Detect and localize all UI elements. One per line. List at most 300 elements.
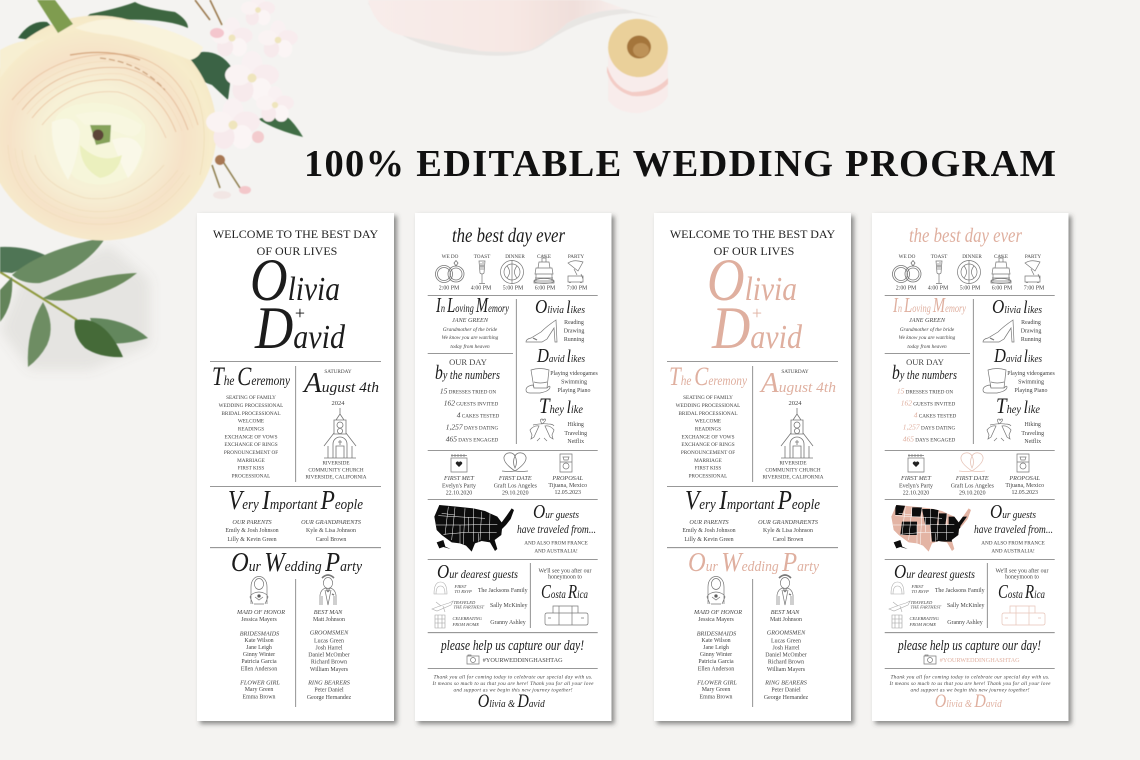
ceremony heading: The Ceremony [212, 362, 291, 391]
memory text [899, 317, 956, 350]
thank you note: Thank you all for coming today to celebrate our special day with us. [434, 674, 592, 680]
heading: welcome: OF OUR LIVES [257, 244, 337, 258]
our day by the numbers [892, 357, 957, 384]
dearest guests list: The Jacksons Family [935, 588, 985, 594]
thank you note: and support as we begin this new journey together! [910, 688, 1030, 694]
David likes: David likes [993, 345, 1042, 367]
groom side: Matt Johnson [313, 617, 345, 623]
dearest guests list: TRAVELED [910, 600, 933, 605]
also from text: AND AUSTRALIA! [534, 548, 578, 554]
dearest guests list: Granny Ashley [947, 620, 983, 626]
flower base [0, 0, 246, 271]
icon: ring box [560, 454, 572, 472]
icon: church [781, 408, 813, 458]
parents: OUR PARENTS [232, 519, 272, 526]
green stem [37, 0, 73, 33]
David hobbies: Swimming [1018, 380, 1044, 386]
couple hobbies: Traveling [564, 431, 587, 437]
our day by the numbers: by the numbers [892, 362, 957, 384]
groom side: Daniel McOmber [308, 652, 350, 658]
groom side: Richard Brown [311, 660, 347, 666]
map of USA [434, 505, 514, 552]
numbers list: 15 DRESSES TRIED ON [440, 386, 496, 396]
date: 2024 [788, 400, 802, 407]
milestones: Evelyn's Party [899, 484, 933, 490]
ceremony list: EXCHANGE OF VOWS [225, 434, 278, 440]
schedule times: 6:00 PM [535, 286, 556, 292]
numbers list: 4 CAKES TESTED [914, 410, 957, 420]
schedule labels: TOAST [931, 254, 948, 260]
grandparents: Kyle & Lisa Johnson [763, 528, 813, 534]
leaf back right [90, 318, 148, 343]
ceremony list [219, 395, 283, 480]
numbers list: 465 DAYS ENGAGED [446, 434, 499, 444]
signature: Olivia & David [478, 691, 545, 712]
schedule times: 2:00 PM [896, 286, 917, 292]
numbers list: 4 CAKES TESTED [457, 410, 500, 420]
spool of ribbon [600, 10, 676, 113]
venue: RIVERSIDE, CALIFORNIA [762, 474, 824, 480]
groom side: Josh Harrel [316, 646, 343, 652]
numbers list: 15 DRESSES TRIED ON [897, 386, 953, 396]
guests travelled heading [974, 501, 1053, 536]
icon: cake [534, 255, 554, 284]
ceremony list: BRIDAL PROCESSIONAL [221, 411, 281, 417]
leaf long upper [12, 237, 106, 283]
icon: top hat [526, 368, 550, 393]
They like: They like [539, 393, 584, 418]
inner petals [54, 103, 145, 185]
wedding party heading: Our Wedding Party [231, 547, 362, 577]
title: 100% EDITABLE WEDDING PROGRAM [304, 143, 1056, 185]
dearest guests list: Sally McKinley [490, 603, 527, 609]
parents: Lilly & Kevin Green [227, 537, 277, 543]
pink blossoms [195, 0, 298, 199]
top petal [75, 19, 203, 60]
icon: plane [432, 601, 453, 612]
also from text [981, 540, 1045, 554]
bride side: Jane Leigh [246, 645, 272, 651]
parents: Emily & Josh Johnson [225, 528, 279, 534]
dearest guests list: CELEBRATING [910, 616, 940, 621]
venue [762, 460, 824, 480]
leaf broad dark [74, 319, 123, 357]
honeymoon text [539, 567, 591, 581]
dearest guests list [452, 584, 528, 627]
ceremony list: PRONOUNCEMENT OF [224, 450, 278, 456]
couple hobbies: Hiking [1025, 422, 1041, 428]
ceremony list: FIRST KISS [695, 466, 721, 472]
groom side: Lucas Green [771, 638, 801, 644]
capture heading: please help us capture our day! [440, 638, 584, 654]
dearest guests list [908, 584, 985, 627]
dearest guests list: FIRST [454, 584, 467, 589]
schedule labels: DINNER [505, 254, 525, 260]
venue: RIVERSIDE, CALIFORNIA [305, 474, 367, 480]
honeymoon text: We'll see you after our [539, 567, 591, 574]
date: 2024 [332, 400, 345, 407]
milestones: Evelyn's Party [442, 484, 476, 490]
names: + [752, 303, 762, 323]
schedule labels: PARTY [1025, 254, 1041, 260]
honeymoon text [996, 567, 1048, 581]
ceremony list: PROCESSIONAL [689, 474, 727, 480]
Olivia likes: Olivia likes [992, 296, 1042, 318]
venue [305, 460, 367, 480]
milestones: PROPOSAL [551, 475, 584, 482]
bride side: Jessica Mayers [698, 617, 734, 623]
groom side [307, 609, 351, 701]
our day by the numbers: by the numbers [435, 362, 500, 384]
honeymoon text: honeymoon to [548, 575, 582, 581]
icon: bride [250, 576, 268, 604]
memory text: We know you are watching [442, 335, 499, 341]
ceremony list [676, 395, 740, 480]
map of USA [891, 505, 971, 552]
groom side: William Mayers [310, 667, 349, 673]
heading: best day ever: the best day ever [909, 225, 1022, 247]
icon: first to rsvp [434, 582, 447, 594]
guests travelled heading: Our guests [990, 501, 1036, 523]
grandparents [758, 519, 818, 543]
guests travelled heading: have traveled from... [974, 522, 1053, 536]
schedule times: 7:00 PM [567, 286, 588, 292]
bride side: Ginny Winter [243, 652, 275, 658]
ribbon [368, 0, 660, 56]
leaf top left [0, 247, 45, 273]
ceremony list: PRONOUNCEMENT OF [681, 450, 735, 456]
schedule labels: CAKE [537, 254, 551, 260]
also from text [524, 540, 588, 554]
couple hobbies [1021, 422, 1044, 445]
icon: bride [707, 576, 725, 604]
names [250, 247, 346, 361]
icon: home [892, 615, 902, 628]
schedule times: 5:00 PM [503, 286, 524, 292]
Olivia hobbies: Running [564, 337, 584, 343]
icon: plate [500, 260, 524, 284]
also from text: AND ALSO FROM FRANCE [524, 540, 588, 546]
thank you note: It means so much to us that you are here! Thank you for all your love [888, 680, 1051, 687]
icon: champagne [936, 261, 942, 284]
hashtag: #YOURWEDDINGHASHTAG [940, 657, 1020, 664]
dearest guests list: TO RSVP [454, 589, 472, 594]
icon: groom [320, 575, 336, 605]
Olivia hobbies: Drawing [564, 328, 584, 334]
thank you note: and support as we begin this new journey together! [454, 688, 573, 694]
names: Olivia [250, 247, 340, 313]
honeymoon text: honeymoon to [1005, 575, 1039, 581]
bride side: Patricia Garcia [241, 659, 277, 665]
guests travelled heading: have traveled from... [517, 522, 596, 536]
grandparents: Carol Brown [773, 537, 803, 543]
dearest guests heading: Our dearest guests [894, 561, 975, 583]
icon: shoe [526, 320, 557, 342]
panel: card 1 black front [197, 213, 394, 721]
left petal [0, 40, 45, 78]
date: August 4th [302, 368, 379, 399]
ceremony list: WELCOME [238, 419, 264, 425]
flower photo [0, 0, 303, 370]
ceremony list: PROCESSIONAL [232, 474, 270, 480]
very important people heading: Very Important People [685, 485, 820, 515]
thank you note [432, 674, 594, 694]
icon: heart [959, 453, 985, 472]
schedule times [439, 286, 588, 292]
groom side: Peter Daniel [771, 688, 801, 694]
panel: card 3 blush front [654, 213, 851, 721]
groom side: Peter Daniel [314, 688, 344, 694]
dearest guests list: FROM HOME [452, 622, 479, 627]
milestones: 29.10.2020 [959, 490, 986, 496]
our day by the numbers: OUR DAY [449, 357, 487, 367]
dearest guests list: FROM HOME [908, 622, 936, 627]
groom side: William Mayers [767, 667, 806, 673]
ceremony list: WELCOME [695, 419, 721, 425]
schedule labels: WE DO [899, 254, 916, 260]
schedule times: 4:00 PM [471, 286, 492, 292]
memory text: Grandmother of the bride [443, 326, 498, 333]
bride side: FLOWER GIRL [239, 680, 280, 686]
memory text: We know you are watching [899, 335, 956, 341]
names [707, 247, 803, 361]
milestones: 29.10.2020 [502, 490, 529, 496]
heading: welcome: OF OUR LIVES [714, 244, 794, 258]
schedule times: 4:00 PM [928, 286, 949, 292]
David hobbies: Playing Piano [558, 388, 590, 394]
couple hobbies: Traveling [1021, 431, 1044, 437]
David hobbies [1007, 371, 1056, 394]
bride side: MAID OF HONOR [693, 609, 742, 616]
hashtag: #YOURWEDDINGHASHTAG [483, 657, 563, 664]
grandparents: OUR GRANDPARENTS [301, 519, 361, 526]
milestones: PROPOSAL [1008, 475, 1041, 482]
bride side: Kate Wilson [244, 638, 274, 644]
names: Olivia [707, 247, 797, 313]
Olivia hobbies [564, 320, 584, 343]
venue: COMMUNITY CHURCH [308, 468, 364, 474]
groom side: Josh Harrel [772, 646, 800, 652]
icon: home [435, 615, 445, 628]
David hobbies [550, 371, 599, 394]
ceremony list: READINGS [238, 426, 264, 432]
bride side: Ginny Winter [700, 652, 732, 658]
venue: RIVERSIDE [322, 460, 350, 466]
icon: shoe [983, 320, 1014, 342]
Olivia hobbies: Reading [564, 320, 584, 326]
milestones: Tijuana, Mexico [1005, 483, 1044, 489]
dark leaf upper left [18, 22, 60, 40]
heading: best day ever: the best day ever [452, 225, 565, 247]
schedule times: 7:00 PM [1024, 286, 1045, 292]
milestones [899, 475, 1044, 496]
names: David [254, 295, 346, 361]
memory text: today from heaven [450, 343, 490, 350]
thank you note: Thank you all for coming today to celebrate our special day with us. [890, 674, 1050, 680]
bride side: FLOWER GIRL [696, 680, 737, 686]
icon: church [324, 408, 356, 458]
milestones: 22.10.2020 [446, 490, 472, 496]
numbers list [897, 386, 957, 444]
They like: They like [996, 393, 1041, 418]
groom side: GROOMSMEN [767, 630, 806, 636]
icon: plane [889, 601, 910, 612]
schedule labels: CAKE [994, 254, 1008, 260]
ceremony list: SEATING OF FAMILY [226, 395, 276, 401]
icon: plate [958, 260, 980, 284]
groom side: Richard Brown [768, 660, 804, 666]
groom side: Matt Johnson [770, 617, 802, 623]
schedule labels: DINNER [962, 254, 982, 260]
parents: Emily & Josh Johnson [682, 528, 736, 534]
icon: gramophone [1025, 261, 1040, 283]
bride side: Emma Brown [243, 694, 275, 700]
dearest guests list: Granny Ashley [490, 620, 526, 626]
grandparents: OUR GRANDPARENTS [758, 519, 818, 526]
David hobbies: Playing Piano [1015, 388, 1047, 394]
memory text: JANE GREEN [452, 317, 489, 324]
bride side: Ellen Anderson [698, 666, 734, 672]
bride side: Patricia Garcia [698, 659, 734, 665]
parents: Lilly & Kevin Green [684, 537, 734, 543]
icon: doves [987, 419, 1011, 441]
parents [225, 519, 279, 543]
our day by the numbers: OUR DAY [906, 357, 944, 367]
milestones: FIRST DATE [498, 475, 532, 482]
icon: first to rsvp [891, 582, 904, 594]
schedule times: 2:00 PM [439, 286, 460, 292]
groom side: RING BEARERS [307, 680, 350, 686]
grandparents: Carol Brown [316, 537, 346, 543]
dearest guests list: CELEBRATING [452, 616, 483, 621]
groom side: George Hernandez [764, 695, 808, 701]
ceremony list: READINGS [695, 426, 721, 432]
dearest guests list: Sally McKinley [947, 603, 984, 609]
dearest guests list: TO RSVP [912, 589, 929, 594]
schedule labels: PARTY [568, 254, 584, 260]
Olivia hobbies: Drawing [1021, 328, 1041, 334]
ceremony list: WEDDING PROCESSIONAL [676, 403, 740, 409]
ceremony list: EXCHANGE OF VOWS [682, 434, 735, 440]
milestones: 12.05.2023 [554, 490, 581, 496]
bride side: Mary Green [702, 687, 730, 693]
icon: rings [436, 260, 464, 282]
schedule labels [899, 254, 1041, 260]
heading: welcome [213, 227, 378, 258]
also from text: AND AUSTRALIA! [991, 548, 1035, 554]
dark leaves behind flower [80, 2, 188, 28]
groom side: RING BEARERS [764, 680, 807, 686]
milestones: 12.05.2023 [1011, 490, 1038, 496]
milestones [442, 475, 587, 496]
dearest guests list: THE FARTHEST [454, 604, 485, 610]
milestones: Tijuana, Mexico [548, 483, 587, 489]
ceremony list: FIRST KISS [238, 466, 264, 472]
capture heading: please help us capture our day! [897, 638, 1041, 654]
David hobbies: Playing videogames [550, 371, 599, 377]
memory text: today from heaven [907, 343, 947, 350]
milestones: FIRST DATE [955, 475, 989, 482]
eucalyptus stem [0, 272, 77, 320]
Olivia likes: Olivia likes [535, 296, 585, 318]
icon: doves [530, 419, 554, 441]
numbers list: 1,257 DAYS DATING [446, 422, 498, 432]
thank you note [888, 674, 1051, 694]
memory text [442, 317, 499, 350]
couple hobbies: Hiking [568, 422, 584, 428]
grandparents: Kyle & Lisa Johnson [306, 528, 356, 534]
milestones: Graft Los Angeles [494, 482, 538, 490]
schedule times [896, 286, 1045, 292]
ceremony list: SEATING OF FAMILY [683, 395, 733, 401]
groom side: Daniel McOmber [765, 652, 807, 658]
milestones: 22.10.2020 [903, 490, 929, 496]
icon: camera [467, 655, 479, 664]
numbers list: 465 DAYS ENGAGED [903, 434, 956, 444]
memory heading: In Loving Memory [892, 293, 966, 317]
David hobbies: Playing videogames [1007, 371, 1056, 377]
ceremony list: WEDDING PROCESSIONAL [219, 403, 283, 409]
milestones: FIRST MET [900, 475, 932, 482]
icon: ring box [1017, 454, 1029, 472]
ceremony list: EXCHANGE OF RINGS [681, 442, 735, 448]
date: SATURDAY [324, 369, 352, 375]
groom side: George Hernandez [307, 695, 351, 701]
bride side: Ellen Anderson [241, 666, 277, 672]
David hobbies: Swimming [561, 380, 587, 386]
memory text: Grandmother of the bride [900, 326, 955, 333]
icon: champagne [479, 261, 485, 284]
grandparents [301, 519, 361, 543]
also from text: AND ALSO FROM FRANCE [981, 540, 1045, 546]
couple hobbies: Netflix [1024, 438, 1041, 445]
names: + [295, 303, 305, 323]
icon: camera [924, 655, 936, 664]
eucalyptus shadow [0, 245, 150, 370]
leaf downward [28, 302, 51, 367]
David likes: David likes [536, 345, 585, 367]
milestones: Graft Los Angeles [951, 482, 995, 490]
parents: OUR PARENTS [689, 519, 729, 526]
icon: groom [777, 575, 793, 605]
icon: cake [991, 255, 1011, 284]
bride side: MAID OF HONOR [236, 609, 285, 616]
venue: RIVERSIDE [779, 460, 807, 466]
date: August 4th [759, 368, 836, 399]
heading: welcome [670, 227, 836, 258]
Olivia hobbies: Reading [1021, 320, 1041, 326]
ceremony list: MARRIAGE [237, 458, 265, 464]
names: David [711, 295, 803, 361]
dearest guests list: TRAVELED [454, 600, 476, 605]
numbers list: 162 GUESTS INVITED [901, 398, 955, 408]
groom side: Lucas Green [314, 638, 344, 644]
ceremony list: EXCHANGE OF RINGS [224, 442, 278, 448]
leaf middle [43, 273, 137, 301]
numbers list: 162 GUESTS INVITED [444, 398, 498, 408]
icon: heart [502, 453, 528, 472]
guests travelled heading [517, 501, 596, 536]
schedule times: 5:00 PM [960, 286, 981, 292]
icon: rings [892, 260, 921, 282]
groom side: GROOMSMEN [310, 630, 349, 636]
schedule labels: TOAST [474, 254, 491, 260]
bride side: Emma Brown [700, 694, 732, 700]
petal ruffles [8, 52, 204, 224]
icon: top hat [983, 368, 1007, 393]
thank you note: It means so much to us that you are here! Thank you for all your love [432, 680, 594, 687]
groom side [764, 609, 808, 701]
